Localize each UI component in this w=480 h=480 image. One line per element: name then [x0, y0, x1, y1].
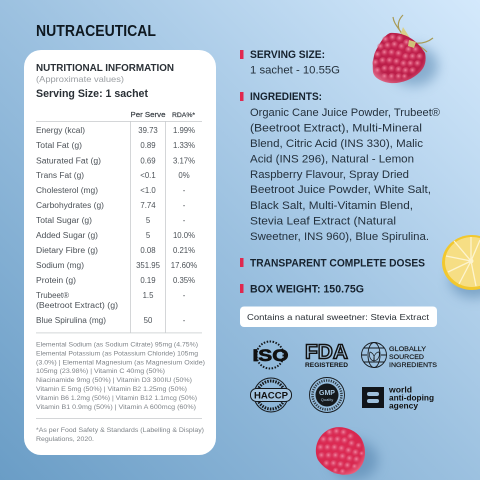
table: nutrition facts: 3.17% — [173, 156, 195, 166]
text: micronutrients: 105mg (23.98%) | Vitamin C 40mg (50%) — [36, 368, 165, 375]
table: nutrition facts: - — [183, 201, 186, 210]
table: nutrition facts: 0% — [178, 171, 190, 180]
logo: globally sourced ingredients: INGREDIENTS — [389, 362, 437, 369]
serving size block: 1 sachet - 10.55G — [250, 64, 340, 76]
callout: stevia sweetener: Contains a natural sweetner: Stevia Extract — [247, 313, 430, 322]
table: nutrition facts: Carbohydrates (g) — [36, 201, 104, 210]
table: nutrition facts: 1.99% — [173, 126, 195, 135]
table: nutrition facts: - — [183, 186, 186, 195]
table: nutrition facts: Sodium (mg) — [36, 261, 84, 270]
logo: world anti-doping agency: world — [388, 386, 412, 394]
table: nutrition facts: 351.95 — [136, 261, 161, 270]
ingredients block: Blend, Citric Acid (INS 330), Malic — [250, 138, 424, 150]
logo: HACCP: HACCP — [254, 390, 288, 400]
table: nutrition facts: 0.35% — [173, 276, 195, 285]
ingredients block: Black Salt, Multi-Vitamin Blend, — [250, 200, 413, 212]
ingredients block: Beetroot Juice Powder, White Salt, — [250, 184, 431, 196]
table: nutrition facts: Blue Spirulina (mg) — [36, 316, 106, 325]
logo: GMP quality: Quality — [321, 397, 333, 402]
table: nutrition facts: Energy (kcal) — [36, 126, 85, 135]
table: nutrition facts: 0.19 — [140, 276, 156, 285]
table: nutrition facts: Added Sugar (g) — [36, 231, 98, 240]
table: nutrition facts: 1.33% — [173, 141, 195, 150]
table: nutrition facts: Trubeet® — [36, 291, 69, 300]
icon: raspberry top — [372, 15, 438, 86]
logo: GMP quality — [310, 378, 344, 412]
title: NUTRACEUTICAL — [36, 23, 156, 40]
ingredients block: Acid (INS 296), Natural - Lemon — [250, 154, 414, 166]
table: nutrition facts: 5 — [146, 216, 151, 225]
text: micronutrients: Niacinamide 9mg (50%) | Vitamin D3 300IU (50%) — [36, 377, 192, 384]
table: nutrition facts: Total Sugar (g) — [36, 216, 92, 225]
text: approximate values: (Approximate values) — [36, 74, 124, 84]
logo: world anti-doping agency — [362, 386, 434, 410]
callout: stevia sweetener — [240, 306, 437, 327]
logo: globally sourced ingredients — [362, 342, 437, 369]
ingredients block: Sweetner, INS 960), Blue Spirulina. — [250, 231, 429, 243]
text: micronutrients: Elemental Sodium (as Sodium Citrate) 95mg (4.75%) — [36, 342, 198, 349]
table: nutrition facts: Per Serve — [130, 110, 166, 119]
table: nutrition facts: 50 — [144, 316, 153, 325]
table: nutrition facts: <1.0 — [140, 186, 156, 195]
serving size block — [240, 49, 340, 76]
table: nutrition facts: (Beetroot Extract) (g) — [36, 301, 118, 310]
logo: world anti-doping agency: anti-doping — [389, 394, 434, 402]
logo: globally sourced ingredients: SOURCED — [389, 354, 424, 361]
table: nutrition facts: - — [183, 291, 186, 300]
table: nutrition facts: 0.08 — [140, 246, 156, 255]
ingredients block: Stevia Leaf Extract (Natural — [250, 216, 396, 228]
logo: world anti-doping agency: agency — [389, 402, 419, 410]
table: nutrition facts: Trans Fat (g) — [36, 171, 84, 180]
heading: serving size: Serving Size: 1 sachet — [36, 88, 148, 100]
table: nutrition facts: 1.5 — [143, 291, 154, 300]
logo: HACCP — [250, 378, 292, 412]
table: nutrition facts — [36, 110, 202, 333]
table: nutrition facts: 0.21% — [173, 246, 195, 255]
ingredients block: INGREDIENTS: — [250, 91, 322, 103]
table: nutrition facts: Protein (g) — [36, 276, 76, 285]
box weight heading: BOX WEIGHT: 150.75G — [250, 284, 364, 296]
table: nutrition facts: 17.60% — [171, 261, 197, 270]
ingredients block: Organic Cane Juice Powder, Trubeet® — [250, 107, 440, 119]
table: nutrition facts: 7.74 — [140, 201, 156, 210]
text: micronutrients — [36, 342, 205, 411]
text: footnote: *As per Food Safety & Standards (Labelling & Display) — [36, 427, 204, 434]
text: micronutrients: (3.0%) | Elemental Magnesium (as Magnesium Oxide) — [36, 360, 205, 366]
heading: nutritional information: NUTRITIONAL INFORMATION — [36, 63, 174, 74]
icon: lemon — [442, 235, 480, 298]
ingredients block: (Beetroot Extract), Multi-Mineral — [250, 122, 422, 134]
table: nutrition facts: 39.73 — [138, 126, 158, 135]
text: footnote: Regulations, 2020. — [36, 436, 94, 443]
serving size block: SERVING SIZE: — [250, 49, 325, 61]
table: nutrition facts: - — [183, 316, 186, 325]
logo: GMP quality: GMP — [319, 390, 335, 397]
text: footnote — [36, 427, 204, 443]
ingredients block — [240, 91, 440, 243]
text: micronutrients: Vitamin B6 1.2mg (50%) | Vitamin B12 1.1mcg (50%) — [36, 395, 197, 402]
table: nutrition facts: Total Fat (g) — [36, 141, 82, 150]
table: nutrition facts: 0.69 — [140, 156, 156, 166]
transparent doses heading: TRANSPARENT COMPLETE DOSES — [250, 258, 425, 270]
table: nutrition facts: Dietary Fibre (g) — [36, 246, 98, 255]
text: micronutrients: Vitamin B1 0.9mg (50%) | Vitamin A 600mcg (60%) — [36, 404, 196, 411]
logo: globally sourced ingredients: GLOBALLY — [389, 346, 426, 353]
panel: nutritional information — [24, 50, 216, 455]
table: nutrition facts: <0.1 — [140, 171, 156, 180]
table: nutrition facts: 0.89 — [140, 141, 156, 150]
table: nutrition facts: 5 — [146, 231, 151, 240]
text: micronutrients: Elemental Potassium (as Potassium Chloride) 105mg — [36, 350, 198, 358]
table: nutrition facts: RDA%* — [172, 112, 195, 119]
logo: ISO: ISO — [252, 347, 289, 365]
text: micronutrients: Vitamin E 5mg (50%) | Vitamin B2 1.25mg (50%) — [36, 386, 187, 393]
logo: ISO — [252, 342, 289, 368]
table: nutrition facts: 10.0% — [173, 231, 195, 240]
logo: FDA registered: REGISTERED — [305, 362, 348, 369]
ingredients block: Raspberry Flavour, Spray Dried — [250, 169, 409, 181]
icon: raspberry bottom — [316, 427, 378, 480]
table: nutrition facts: - — [183, 216, 186, 225]
table: nutrition facts: Cholesterol (mg) — [36, 186, 98, 195]
logo: FDA registered: FDA — [305, 342, 348, 364]
table: nutrition facts: Saturated Fat (g) — [36, 156, 101, 166]
